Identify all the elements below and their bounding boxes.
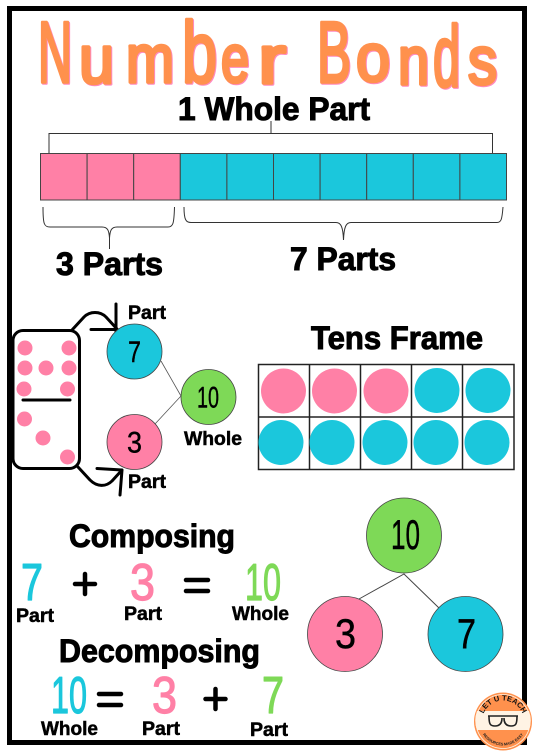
plus sign bbox=[206, 689, 226, 709]
logo cream band bbox=[475, 711, 531, 730]
heading: 3 Parts: 3 Parts bbox=[56, 246, 163, 282]
label: Part: Part bbox=[124, 604, 163, 625]
title: B bbox=[317, 5, 351, 101]
digit 7: 7 bbox=[21, 554, 43, 612]
title: m bbox=[126, 21, 174, 97]
bracket: whole bbox=[49, 121, 492, 153]
logo bottom text: RESOURCES MADE EASY bbox=[483, 733, 523, 746]
equals sign bbox=[186, 580, 208, 591]
large circle: 7: 7 bbox=[457, 610, 476, 657]
brace: 3 parts bbox=[43, 207, 174, 249]
digit 7: 7 bbox=[262, 667, 284, 725]
digit 3: 3 bbox=[152, 667, 177, 725]
domino dots: three bbox=[17, 412, 75, 464]
connector lines: large bond bbox=[359, 574, 439, 608]
title: s bbox=[468, 23, 497, 99]
heading: Composing: Composing bbox=[69, 518, 235, 554]
label: Part: Part bbox=[142, 719, 181, 740]
tens frame bbox=[258, 364, 514, 470]
title: e bbox=[221, 21, 249, 97]
digit 10: 10 bbox=[245, 554, 281, 612]
pink bar cells bbox=[40, 154, 180, 200]
circle: 3 part: 3 bbox=[127, 426, 142, 460]
title: r bbox=[258, 22, 286, 98]
large circle: 7 bbox=[428, 596, 503, 672]
digit 3: 3 bbox=[130, 554, 155, 612]
large circle: 3 bbox=[308, 596, 382, 672]
label: Whole: Whole bbox=[184, 429, 242, 450]
large circle: 10: 10 bbox=[391, 511, 420, 558]
heading: Tens Frame: Tens Frame bbox=[311, 320, 483, 356]
bar model bbox=[40, 154, 506, 200]
logo top text: LET U TEACH bbox=[479, 695, 527, 714]
title: d bbox=[433, 9, 460, 105]
domino divider bbox=[23, 398, 70, 402]
teal bar cells bbox=[180, 154, 507, 200]
arrow: domino to 7 bbox=[72, 304, 117, 332]
equation: composing bbox=[16, 554, 289, 627]
circle: 7 part: 7 bbox=[128, 336, 141, 369]
title: n bbox=[398, 23, 429, 99]
heading: Decomposing: Decomposing bbox=[59, 633, 260, 669]
label: Part: Part bbox=[250, 720, 289, 741]
arrow: domino to 3 bbox=[78, 467, 122, 495]
circle: 3 part bbox=[107, 414, 162, 470]
frame grid bbox=[258, 364, 514, 470]
label: top Part: Part bbox=[128, 303, 167, 324]
label: Part: Part bbox=[16, 606, 55, 627]
large circle: 3: 3 bbox=[335, 610, 356, 657]
title bbox=[38, 5, 497, 105]
connector lines: small bond bbox=[155, 361, 181, 424]
logo badge bbox=[474, 692, 532, 750]
logo glasses bbox=[488, 716, 518, 726]
title: o bbox=[356, 20, 390, 96]
heading: 1 Whole Part: 1 Whole Part bbox=[178, 91, 370, 127]
equation: decomposing bbox=[41, 667, 289, 741]
label: Whole: Whole bbox=[232, 604, 289, 625]
circle: 10 whole: 10 bbox=[197, 382, 219, 414]
domino bbox=[13, 330, 80, 468]
brace: 7 parts bbox=[184, 207, 503, 240]
domino dots: seven bbox=[16, 340, 76, 396]
circle: 10 whole bbox=[181, 370, 236, 424]
title: N bbox=[38, 5, 72, 101]
large circle: 10 bbox=[366, 498, 442, 573]
equals sign bbox=[99, 694, 121, 705]
title: b bbox=[182, 5, 217, 101]
heading: 7 Parts: 7 Parts bbox=[290, 241, 396, 277]
plus sign bbox=[75, 574, 95, 594]
circle: 7 part bbox=[107, 324, 162, 379]
label: bottom Part: Part bbox=[128, 472, 167, 493]
pink counters bbox=[261, 368, 408, 414]
teal counters bbox=[258, 368, 510, 465]
digit 10: 10 bbox=[51, 667, 87, 725]
title: u bbox=[79, 22, 114, 98]
label: Whole: Whole bbox=[41, 719, 98, 740]
